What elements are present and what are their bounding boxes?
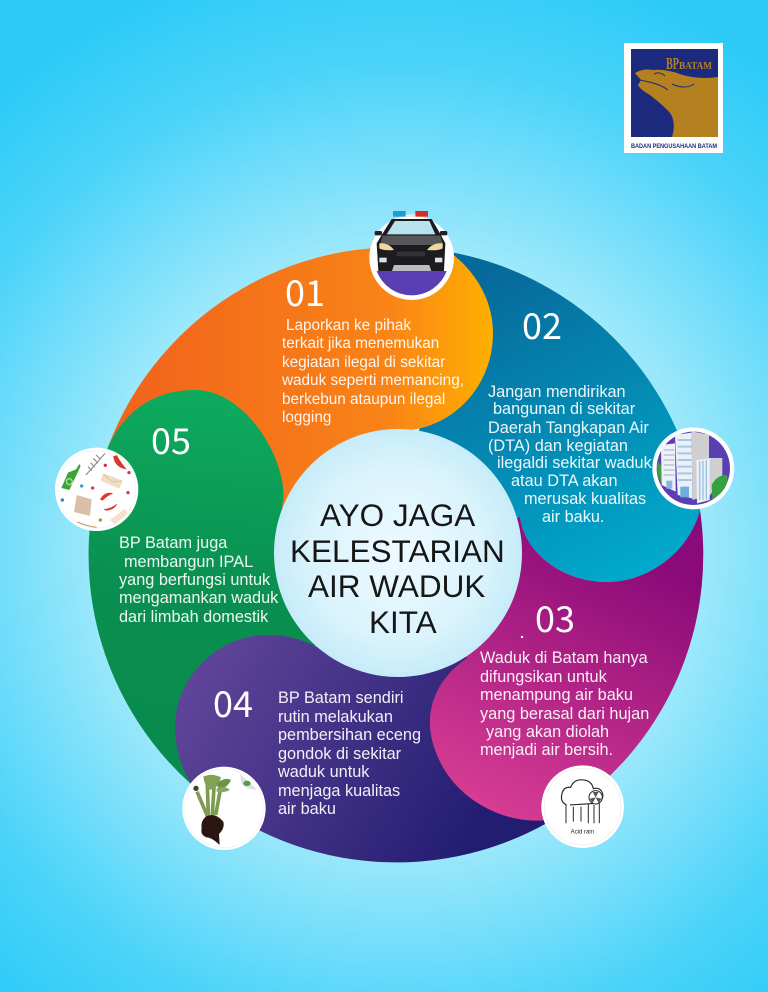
text 04: pembersihan eceng: [278, 726, 421, 744]
text 05: membangun IPAL: [124, 553, 253, 571]
logo: BP Batam: BADAN PENGUSAHAAN BATAM: [631, 144, 717, 150]
text 04: rutin melakukan: [278, 708, 393, 726]
number 05: 05: [151, 413, 191, 465]
logo: BP Batam: BP: [666, 54, 679, 73]
title: [290, 497, 505, 640]
text 01: kegiatan ilegal di sekitar: [282, 354, 445, 371]
text 02: bangunan di sekitar: [493, 400, 636, 418]
icon: waste: [55, 448, 138, 531]
text 04: [277, 689, 421, 818]
text 05: dari limbah domestik: [119, 608, 269, 626]
icon: police car: [369, 211, 454, 300]
text 03: yang akan diolah: [486, 723, 609, 741]
number 02: 02: [522, 298, 562, 350]
icon: buildings: [652, 427, 734, 509]
text 04: BP Batam sendiri: [278, 689, 404, 707]
title: KITA: [369, 604, 437, 640]
icon: acid rain: [541, 765, 624, 848]
text 03: difungsikan untuk: [480, 668, 608, 686]
logo: BP Batam: BATAM: [679, 61, 713, 72]
text 01: logging: [282, 409, 331, 426]
text 04: gondok di sekitar: [278, 745, 402, 763]
text 02: Jangan mendirikan: [488, 383, 626, 401]
number 03: 03: [535, 591, 575, 643]
text 04: menjaga kualitas: [278, 782, 400, 800]
text 04: waduk untuk: [277, 763, 370, 781]
number 04: 04: [213, 676, 253, 728]
text 05: BP Batam juga: [119, 534, 228, 552]
panel 03 shape: magenta: [398, 510, 703, 821]
title: AIR WADUK: [308, 568, 485, 604]
panel 04 shape: purple: [175, 553, 547, 862]
text 02: atau DTA akan: [511, 472, 618, 490]
text 05: mengamankan waduk: [119, 589, 279, 607]
text 01: terkait jika menemukan: [282, 335, 439, 352]
text 03: yang berasal dari hujan: [480, 705, 649, 723]
panel 02 shape: teal: [398, 252, 700, 582]
text 05: [119, 534, 279, 626]
text 02: ilegaldi sekitar waduk: [497, 454, 653, 472]
text 04: air baku: [278, 800, 336, 818]
dot near 03: [521, 636, 523, 638]
text 05: yang berfungsi untuk: [119, 571, 271, 589]
text 03: [480, 649, 649, 759]
panel 05 shape: green: [89, 390, 398, 785]
text 03: Waduk di Batam hanya: [480, 649, 649, 667]
icon: acid rain: Acid rain: [571, 829, 594, 835]
text 01: waduk seperti memancing,: [281, 372, 464, 389]
text 02: Daerah Tangkapan Air: [488, 419, 649, 437]
text 02: [488, 383, 653, 526]
text 01: Laporkan ke pihak: [286, 317, 411, 334]
panel 01 shape: orange: [108, 247, 493, 553]
text 03: menampung air baku: [480, 686, 633, 704]
title: AYO JAGA: [320, 497, 475, 533]
centre circle: [274, 429, 522, 677]
text 01: [281, 317, 464, 426]
text 02: air baku.: [542, 508, 604, 526]
text 02: (DTA) dan kegiatan: [488, 437, 628, 455]
number 01: 01: [285, 265, 325, 317]
text 03: menjadi air bersih.: [480, 741, 613, 759]
icon: water hyacinth: [182, 767, 266, 850]
logo: BP Batam: [624, 43, 723, 153]
title: KELESTARIAN: [290, 533, 505, 569]
text 01: berkebun ataupun ilegal: [282, 391, 445, 408]
text 02: merusak kualitas: [524, 490, 646, 508]
